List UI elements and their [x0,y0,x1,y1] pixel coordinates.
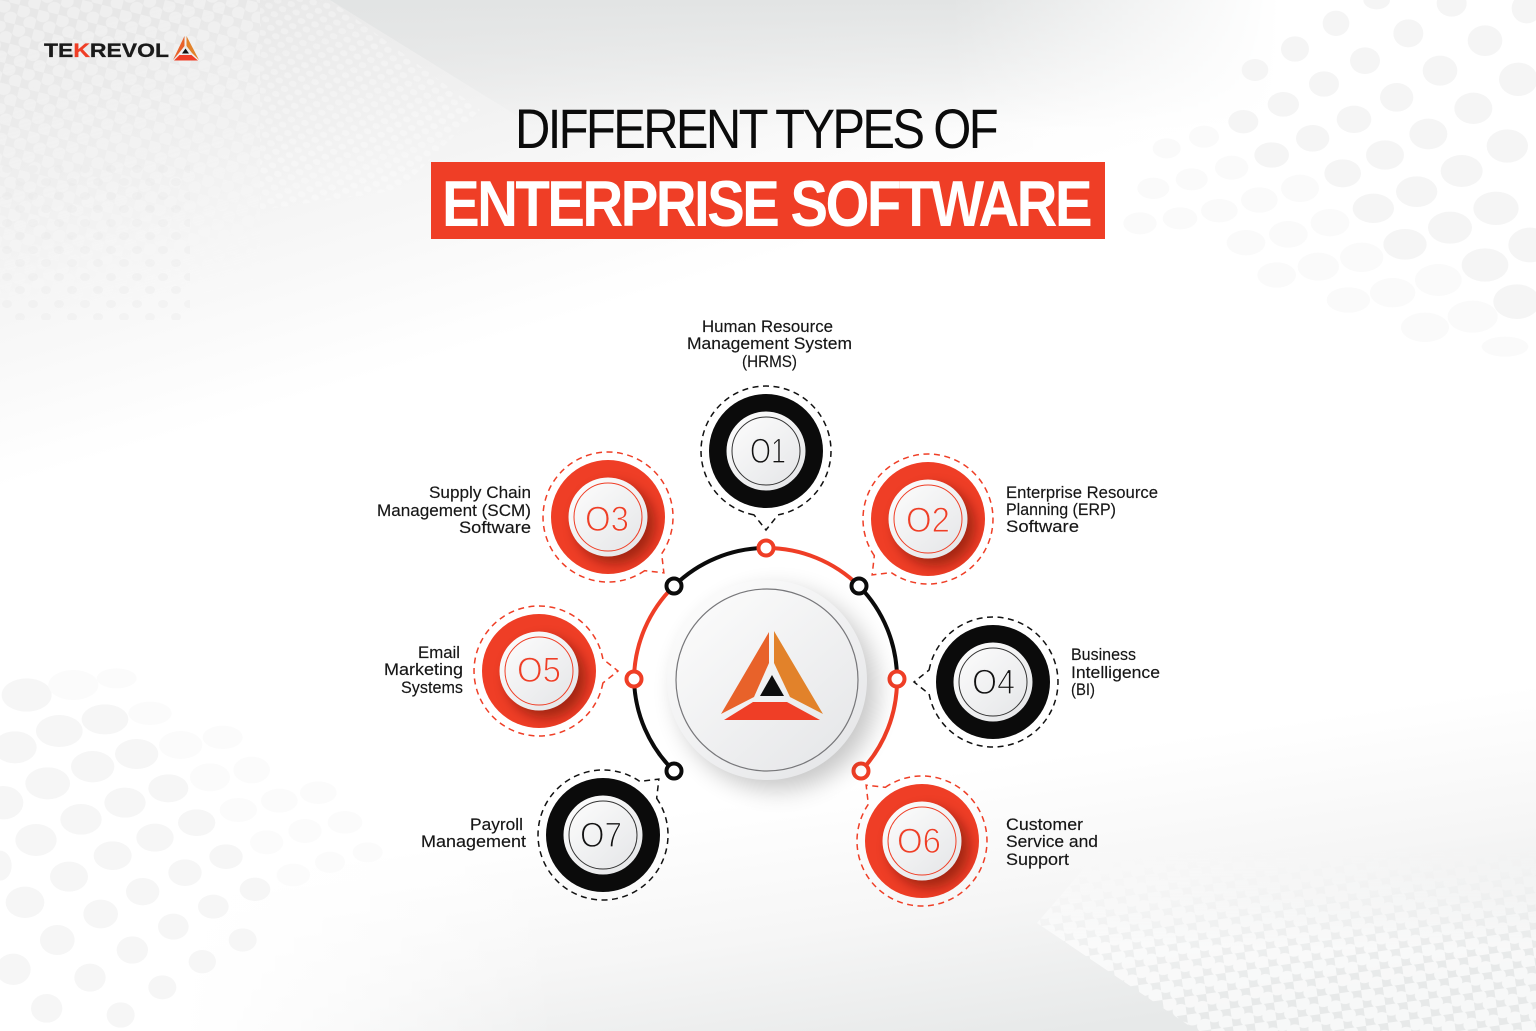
label 03: Software [459,518,531,537]
logo wordmark: TE KREVOL [44,41,169,62]
label 06: Customer [1006,815,1083,834]
title [431,97,1105,240]
logo [44,36,199,62]
label 05: Email [418,643,460,662]
hub arc ring [634,548,897,771]
step 05: O5 [517,651,561,690]
step 03: O3 [585,500,629,539]
step 05 [474,606,618,736]
step 02 [862,453,994,585]
step 07 [511,733,705,927]
step 07: O7 [580,816,622,855]
label 04: (BI) [1071,680,1095,699]
label 03 [377,483,531,537]
label 02 [1006,483,1158,536]
label 04: Business [1071,645,1136,664]
label 03: Management (SCM) [377,501,531,520]
label 07: Management [421,832,526,851]
label 04: Intelligence [1071,663,1160,682]
label 05: Systems [401,678,463,697]
label 01 [687,317,852,371]
label 07: Payroll [470,815,523,834]
label 03: Supply Chain [429,483,531,502]
label 05: Marketing [384,660,463,679]
step 01: O1 [750,432,786,471]
step 06 [856,775,988,907]
step 03 [542,451,674,583]
logo mark [173,36,199,60]
icon: hub triangle logo [721,631,823,720]
label 02: Enterprise Resource [1006,483,1158,502]
label 01: Management System [687,334,852,353]
label 01: (HRMS) [742,352,797,371]
step 01 [701,386,831,530]
label 06: Support [1006,850,1069,869]
step 04: O4 [972,663,1015,702]
center hub [667,580,877,790]
label 01: Human Resource [702,317,833,336]
label 02: Software [1006,517,1079,536]
step 04 [914,617,1058,747]
label 06 [1006,815,1098,869]
step 02: O2 [906,501,950,540]
label 05 [384,643,463,697]
label 07 [421,815,526,851]
label 04 [1071,645,1160,699]
label 06: Service and [1006,832,1098,851]
title line 1: DIFFERENT TYPES OF [515,97,997,160]
arc nodes [626,540,904,778]
label 02: Planning (ERP) [1006,500,1116,519]
title banner: ENTERPRISE SOFTWARE [442,167,1091,240]
step 06: O6 [897,822,941,861]
